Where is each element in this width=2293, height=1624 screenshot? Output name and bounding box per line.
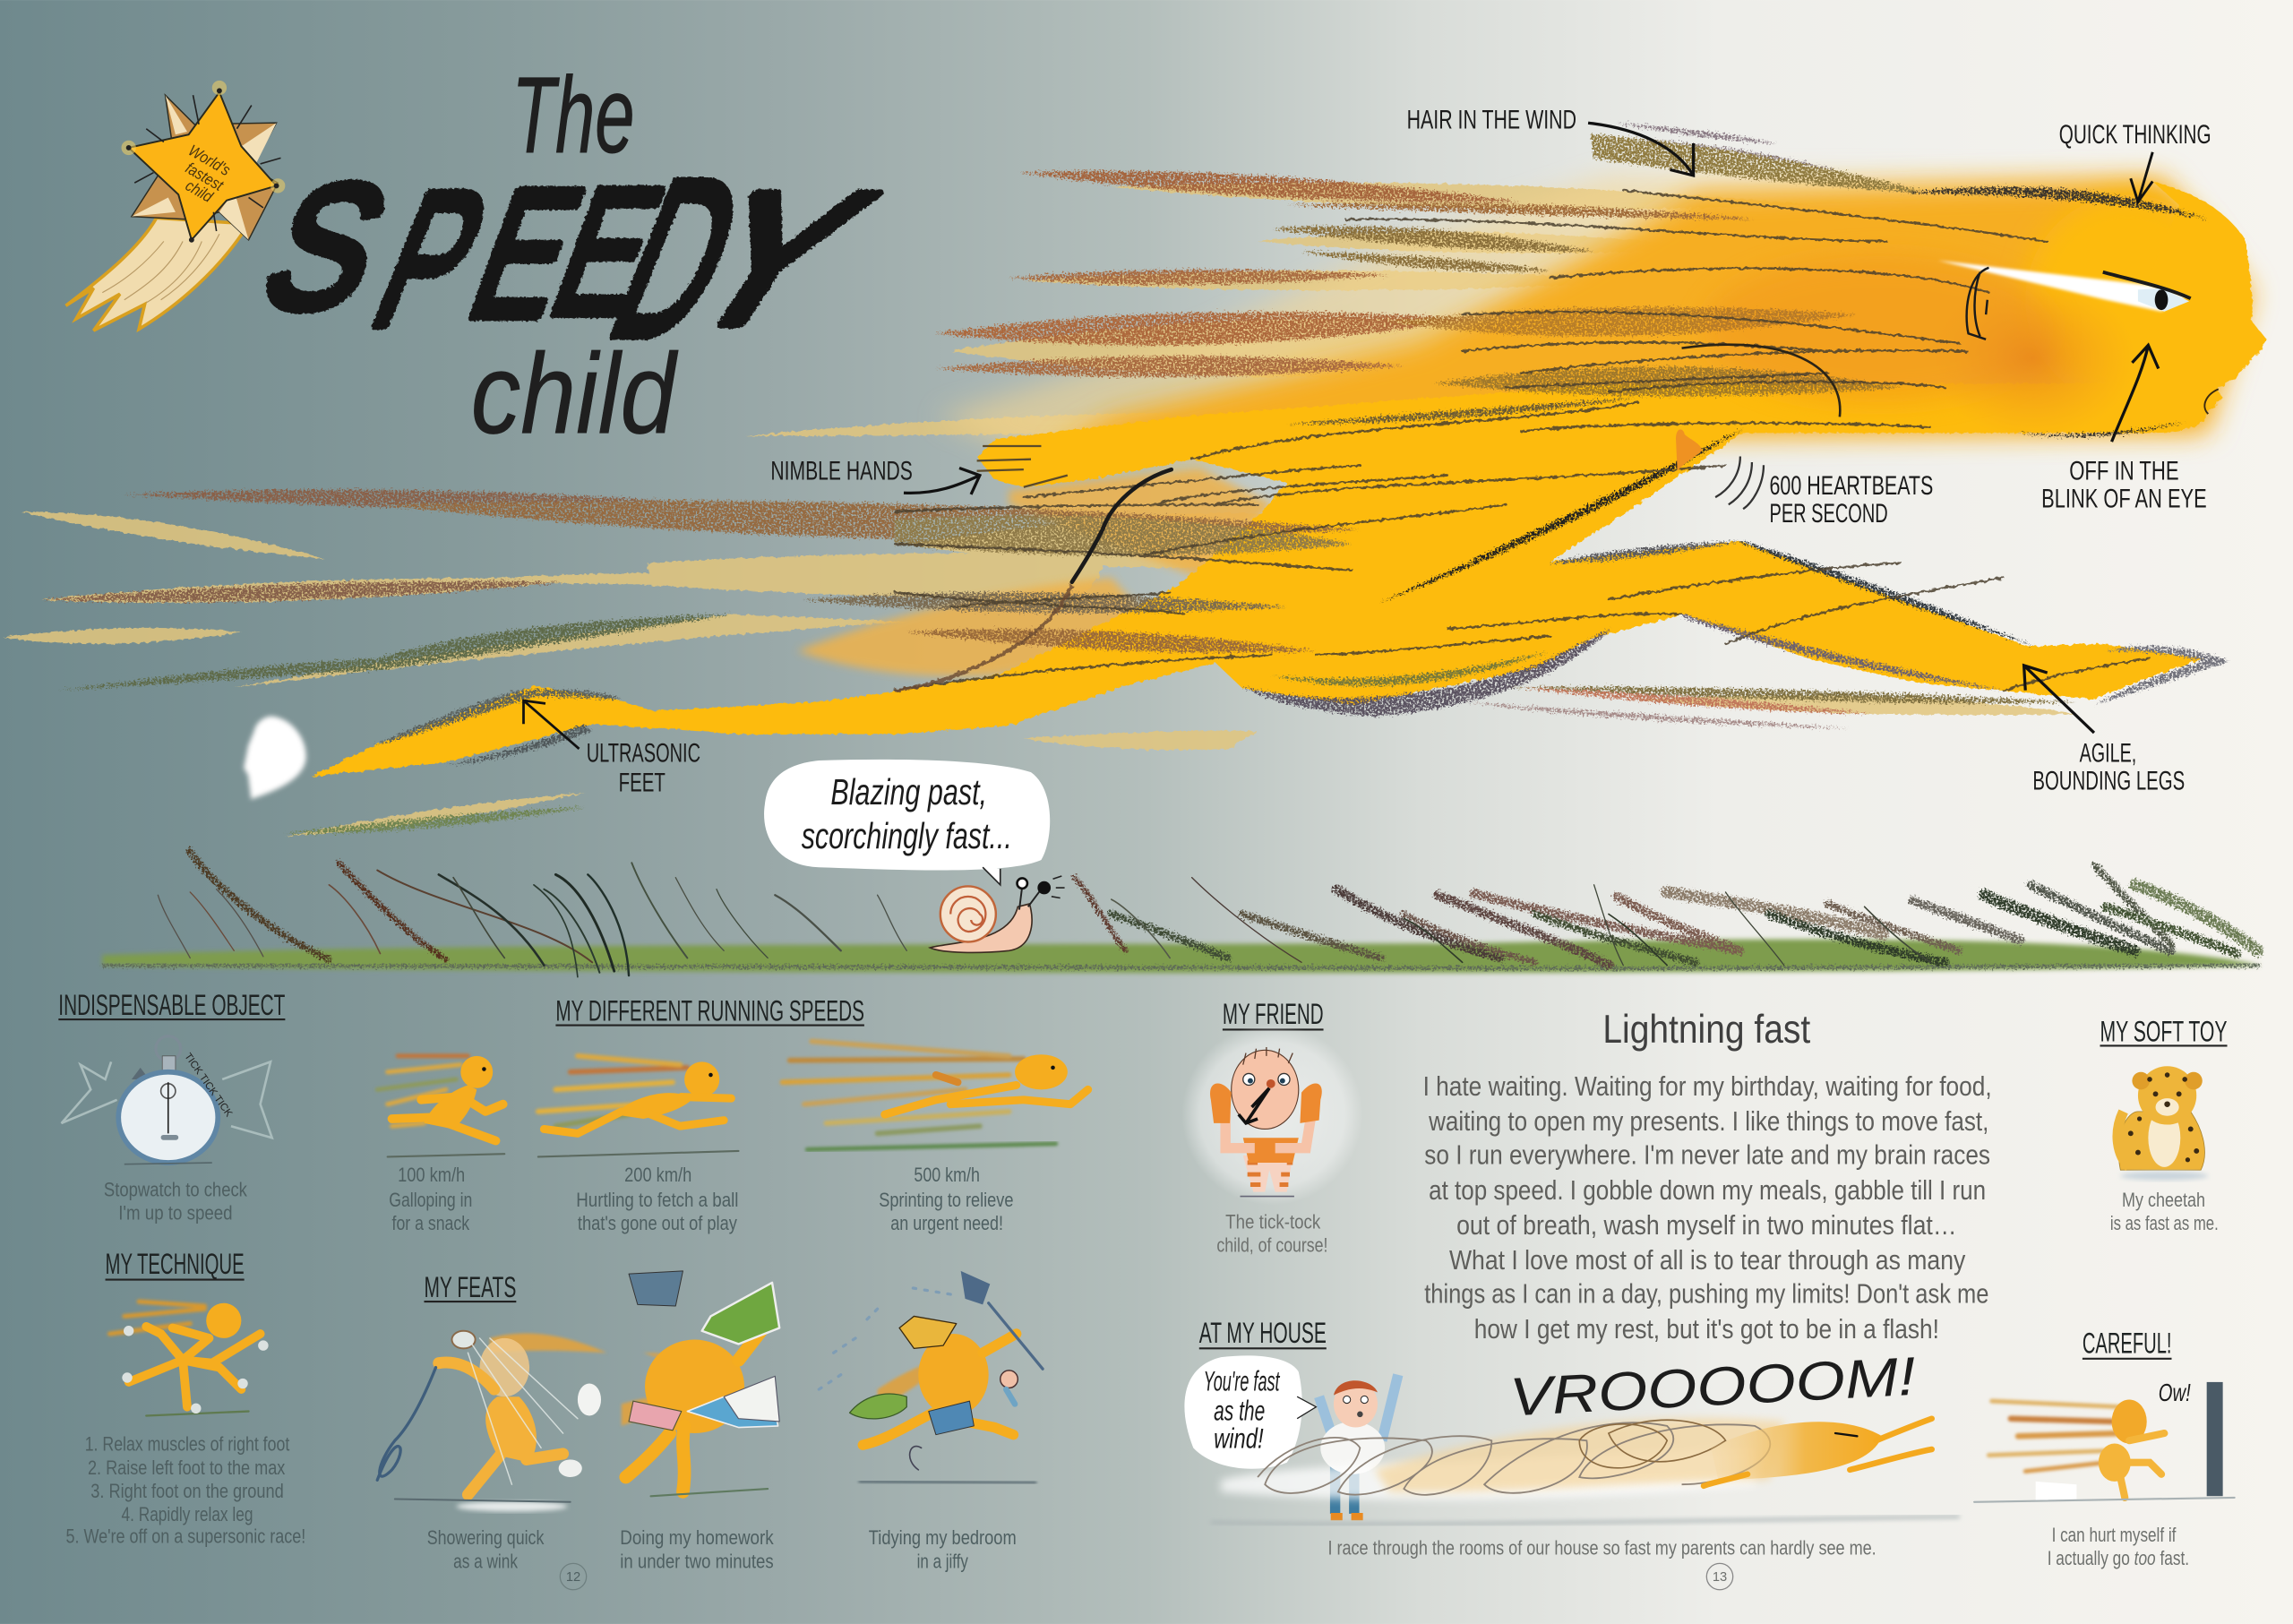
label: 600 heartbeats: 600 HEARTBEATS [1770,471,1933,501]
caption [2110,1189,2219,1234]
title: E [448,152,604,355]
page number 13 [1706,1563,1733,1590]
caption: child, of course! [1216,1234,1327,1257]
icon: snail [930,876,1065,952]
wall [2207,1382,2223,1496]
panel: my soft toy [2100,1014,2228,1234]
label: agile bounding legs [2024,666,2185,796]
illustration: parent [1319,1375,1398,1517]
captions: that's gone out of play [578,1212,737,1234]
crayon hair strokes [41,123,2230,834]
heading [424,1270,516,1303]
speech bubble: blazing past: Blazing past, [830,771,987,812]
illustration: speeding child [1704,1419,1932,1486]
steps [65,1433,305,1548]
captions: 200 km/h [624,1164,691,1186]
caption: I can hurt myself if [2052,1524,2177,1546]
body text [1423,1072,1992,1345]
illustration: tick-tock child [1181,1024,1363,1205]
illustration: star badge: fastest [183,159,228,195]
label: off in the blink of an eye [2041,345,2207,514]
label: 600 heartbeats: PER SECOND [1770,499,1888,528]
panel: my technique [65,1247,305,1548]
speech bubble: blazing past [764,760,1050,885]
label: 600 heartbeats [1770,471,1933,528]
body text: how I get my rest, but it's got to be in a flash! [1474,1315,1939,1345]
body text: things as I can in a day, pushing my limits! Don't ask me [1424,1280,1988,1310]
illustration: star badge [65,81,285,331]
back line [1072,469,1172,582]
illustration: star badge: World's [185,141,234,179]
caption: I race through the rooms of our house so fast my parents can hardly see me. [1327,1537,1876,1560]
onomatopoeia: VROOOOOM! [1508,1345,1918,1427]
illustration: speeding child [3,123,2267,837]
dark hair lines [895,190,2150,691]
caption [1216,1210,1327,1257]
title: Y [641,153,908,363]
panel: my feats [377,1270,1043,1572]
heading: MY FEATS [424,1270,516,1303]
panel: careful [1974,1326,2235,1569]
panel: my different running speeds [377,994,1088,1234]
title: child [471,330,679,457]
label: quick thinking [2059,120,2211,202]
label: hair in the wind [1407,106,1694,176]
steps: 4. Rapidly relax leg [122,1503,253,1525]
icon: stopwatch: TICK TICK TICK [182,1052,234,1120]
soft hair halo [936,176,2194,453]
captions: Hurtling to fetch a ball [576,1189,738,1211]
label: agile bounding legs: BOUNDING LEGS [2032,767,2185,796]
hair mass [1053,178,2252,453]
caption: is as fast as me. [2110,1212,2219,1234]
speech bubble: You're fast [1204,1366,1280,1397]
caption: Stopwatch to check [104,1179,248,1201]
captions: an urgent need! [890,1212,1003,1234]
label: off in the blink of an eye: OFF IN THE [2069,457,2179,486]
eye [2103,272,2191,312]
caption [2048,1524,2189,1569]
speech bubble: blazing past: scorchingly fast... [802,815,1012,856]
body text: so I run everywhere. I'm never late and my brain races [1424,1141,1990,1171]
captions: for a snack [392,1212,470,1234]
label: ultrasonic feet [523,700,700,797]
figure: tidying [819,1271,1043,1483]
panel: my friend [1181,997,1363,1257]
title: S [241,148,412,344]
labels with arrows [523,106,2211,797]
ear [1967,268,1988,339]
steps: 5. We're off on a supersonic race! [65,1525,305,1547]
head glow [2025,194,2230,405]
body [312,181,2267,777]
label: agile bounding legs: AGILE, [2080,739,2136,769]
panel: lightning fast story [1423,1008,1992,1345]
captions: Doing my homework [620,1526,775,1549]
heading [1223,997,1324,1030]
captions [427,1526,1017,1572]
speech bubble [1184,1355,1316,1469]
illustration: star badge: child [183,176,217,206]
page number 12 [560,1563,587,1590]
steps: 3. Right foot on the ground [90,1480,284,1502]
heading: INDISPENSABLE OBJECT [58,988,285,1021]
body text: waiting to open my presents. I like things to move fast, [1428,1107,1988,1137]
heading: MY DIFFERENT RUNNING SPEEDS [555,994,864,1027]
label: quick thinking: QUICK THINKING [2059,120,2211,150]
page number 13: 13 [1713,1570,1727,1585]
caption [104,1179,248,1224]
caption: I'm up to speed [118,1202,233,1224]
fingers [977,446,1068,487]
body text: What I love most of all is to tear through as many [1449,1246,1966,1276]
heading: CAREFUL! [2083,1326,2171,1359]
speech bubble: wind! [1214,1422,1264,1454]
captions: Showering quick [427,1526,545,1549]
caption: The tick-tock [1225,1210,1321,1233]
heading: Lightning fast [1602,1008,1810,1052]
icon: stopwatch [62,1036,272,1164]
heart [1676,429,1702,471]
heading [2083,1326,2171,1359]
pale orange patches [797,468,1272,676]
heading: MY SOFT TOY [2100,1014,2228,1047]
heading: MY FRIEND [1223,997,1324,1030]
captions: 500 km/h [914,1164,980,1186]
illustration: child hitting wall [1974,1399,2235,1502]
label: nimble hands: NIMBLE HANDS [770,457,913,486]
label: ultrasonic feet: FEET [619,768,666,797]
body text: at top speed. I gobble down my meals, gabble till I run [1429,1176,1986,1206]
runner: 200 km/h [538,1056,738,1156]
title: P [349,152,514,365]
grass [102,851,2261,977]
captions: 100 km/h [398,1164,465,1186]
cloud puff [245,717,305,798]
ground line [1211,1517,1960,1524]
captions: Tidying my bedroom [869,1526,1017,1549]
title: E [530,151,683,351]
eye streak [1937,261,2186,312]
exclamation: Ow! [2159,1379,2191,1406]
page number 12: 12 [566,1570,580,1585]
captions: as a wink [453,1550,519,1572]
heading: MY TECHNIQUE [106,1247,245,1280]
label: ultrasonic feet: ULTRASONIC [587,739,700,769]
pale base streaks [3,183,2076,837]
captions: in a jiffy [917,1550,968,1572]
speech bubble: as the [1214,1395,1265,1426]
title [241,55,908,457]
caption: I actually go too fast. [2048,1547,2189,1569]
body text: I hate waiting. Waiting for my birthday, waiting for food, [1423,1072,1992,1102]
runner: 100 km/h [377,1056,504,1156]
figure: multi-legged runner [109,1302,269,1415]
title: The [511,55,635,176]
figure: homework [622,1271,779,1496]
captions: Sprinting to relieve [879,1189,1013,1211]
figure: showering [377,1331,607,1511]
panel: at my house [1184,1316,1960,1560]
body text: out of breath, wash myself in two minutes flat… [1456,1211,1956,1241]
captions: Galloping in [389,1189,472,1211]
label: off in the blink of an eye: BLINK OF AN EYE [2041,485,2207,514]
runner: 500 km/h [782,1041,1088,1149]
title: D [583,134,773,382]
label: hair in the wind: HAIR IN THE WIND [1407,106,1576,135]
illustration: cheetah toy [2117,1066,2208,1181]
captions: in under two minutes [620,1550,774,1572]
steps: 2. Raise left foot to the max [88,1456,285,1479]
panel: indispensable object [58,988,285,1224]
arm line [1682,345,1840,417]
steps: 1. Relax muscles of right foot [85,1433,289,1456]
captions [389,1164,1013,1234]
heartbeat marks [1715,456,1764,509]
caption: My cheetah [2122,1189,2205,1211]
mouth [2204,389,2219,414]
heading: AT MY HOUSE [1199,1316,1327,1349]
illustration: scribble trail [1221,1419,1784,1499]
